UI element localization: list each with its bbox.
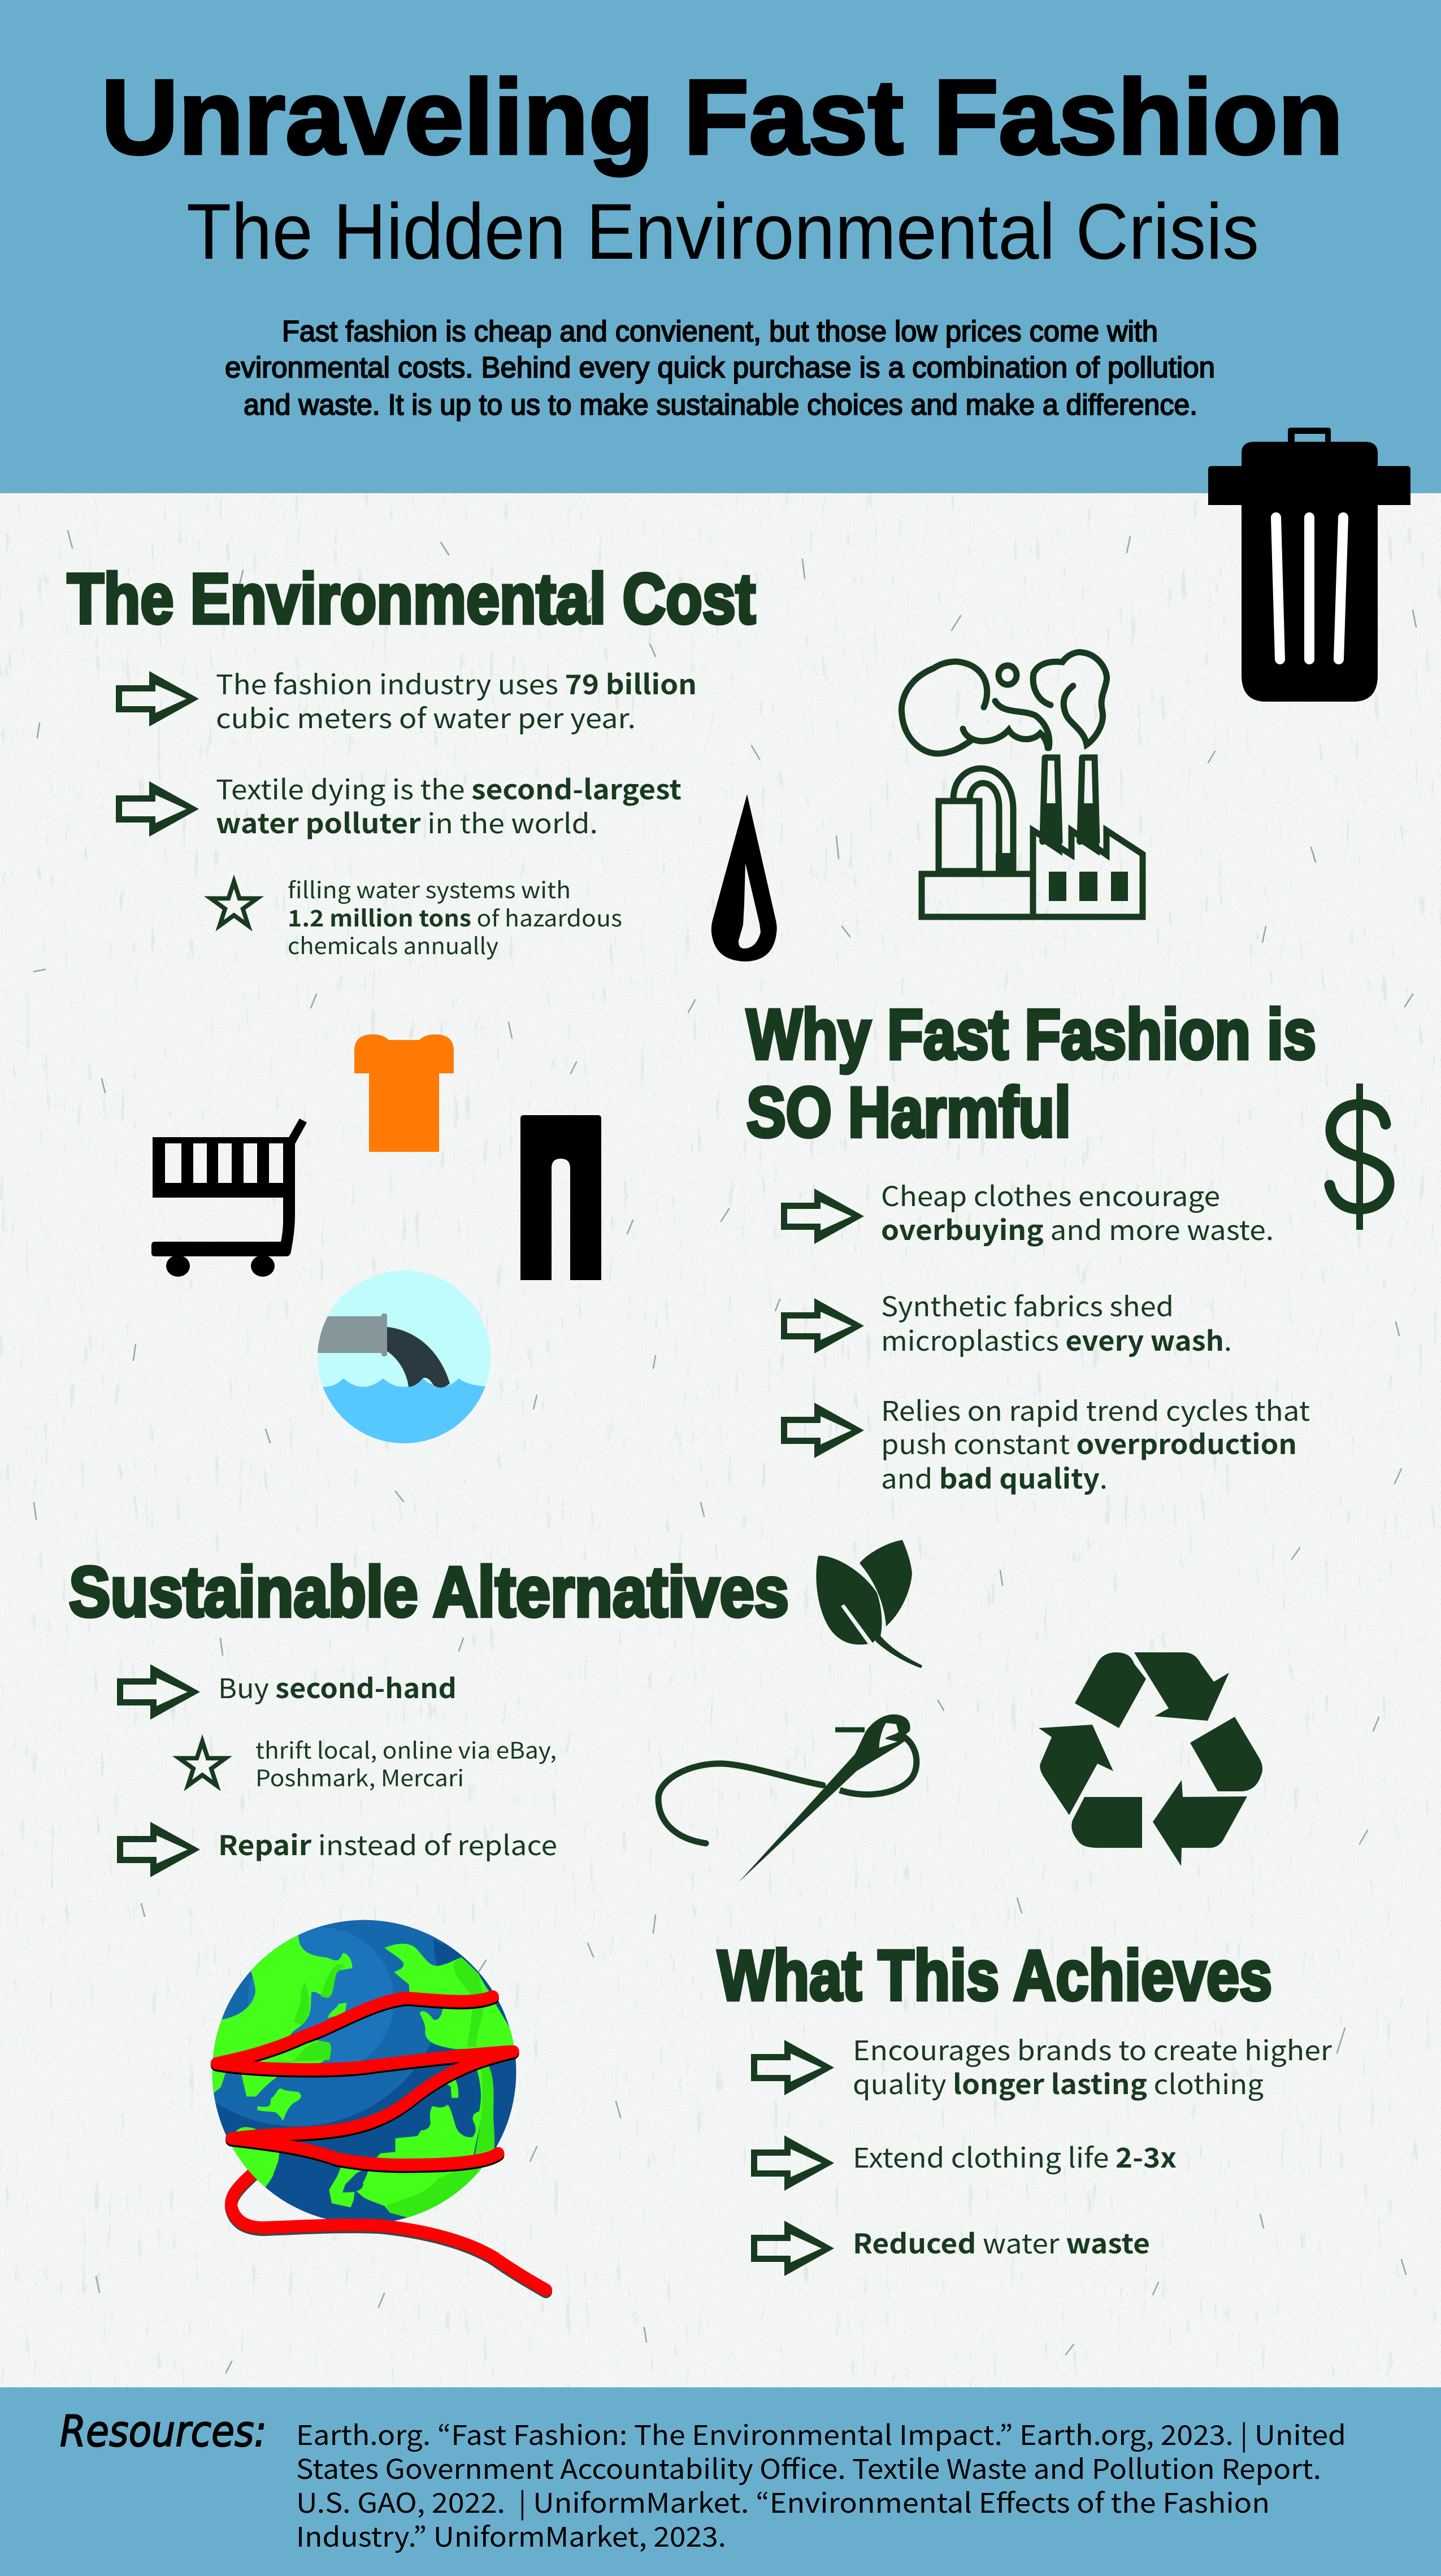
arrow (116, 671, 199, 726)
text: microplastics (881, 1285, 1232, 1359)
panel: resources footer (0, 2387, 1441, 2576)
text: overbuying: Cheap clothes encourage (881, 1174, 1220, 1214)
text: thrift options (255, 1733, 557, 1793)
panel: what this achieves (718, 1937, 1332, 2276)
text: clothing life: Extend clothing life 2-3x (853, 2136, 1177, 2175)
icon: shopping cart (151, 1119, 307, 1277)
intro paragraph: and waste. It is up to us to make sustainable choices and make a difference. (244, 389, 1197, 421)
text: overproduction (881, 1389, 1310, 1496)
panel: paper background (0, 493, 1441, 2387)
text: hazardous chemicals: 1.2 million tons of hazardous (288, 900, 622, 933)
heading: The Environmental Cost (67, 560, 756, 638)
panel: sustainable alternatives (69, 1553, 789, 1877)
intro paragraph: evironmental costs. Behind every quick purchase is a combination of pollution (225, 351, 1215, 384)
text: buy second-hand: Buy second-hand (218, 1666, 457, 1706)
icon: dollar sign (1330, 1084, 1389, 1230)
text: water polluter: Textile dying is the second-largest (216, 768, 682, 807)
text: higher quality: Encourages brands to create higher (853, 2029, 1332, 2068)
icon: water drop (711, 794, 777, 961)
text: citations (296, 2413, 1346, 2555)
arrow (751, 2135, 834, 2191)
heading: SO Harmful (746, 1073, 1071, 1152)
text: thrift options: thrift local, online via eBay, (255, 1733, 557, 1765)
text: hazardous chemicals: chemicals annually (288, 928, 498, 961)
intro paragraph: Fast fashion is cheap and convienent, but those low prices come with (282, 315, 1158, 348)
text: higher quality (853, 2029, 1332, 2102)
text: overproduction: push constant overproduction (881, 1422, 1297, 1462)
icon: leaves (816, 1540, 922, 1668)
panel: the environmental cost (67, 560, 756, 961)
icon: factory (901, 652, 1143, 917)
arrow (117, 1664, 200, 1720)
text: water waste: Reduced water waste (853, 2222, 1150, 2261)
heading: Sustainable Alternatives (69, 1553, 789, 1631)
intro paragraph (225, 315, 1215, 421)
subtitle: The Hidden Environmental Crisis (186, 187, 1259, 276)
text: hazardous chemicals: filling water systems with (288, 872, 571, 905)
star icon (204, 874, 264, 932)
text: repair: Repair instead of replace (218, 1824, 557, 1863)
star icon (172, 1734, 232, 1791)
heading: What This Achieves (718, 1937, 1272, 2015)
title: Unraveling Fast Fashion (101, 58, 1343, 176)
text: thrift options: Poshmark, Mercari (255, 1760, 464, 1793)
heading: resources: Resources: (60, 2406, 267, 2456)
arrow (117, 1822, 200, 1877)
arrow (751, 2221, 834, 2276)
arrow (751, 2040, 834, 2095)
text: citations: Earth.org. “Fast Fashion: The Environmental Impact.” Earth.org, 2023. | United (296, 2413, 1346, 2453)
text: microplastics: Synthetic fabrics shed (881, 1285, 1174, 1324)
text: overbuying: overbuying and more waste. (881, 1208, 1274, 1248)
text: citations: Industry.” UniformMarket, 2023. (296, 2515, 726, 2555)
text: water polluter (216, 768, 682, 841)
red thread (217, 1996, 546, 2292)
arrow (781, 1298, 864, 1354)
text: overbuying (881, 1174, 1274, 1248)
text: citations: U.S. GAO, 2022. | UniformMarket. “Environmental Effects of the Fashion (296, 2481, 1270, 2521)
text: higher quality: quality longer lasting clothing (853, 2062, 1264, 2102)
text: overproduction: Relies on rapid trend cycles that (881, 1389, 1310, 1429)
panel: illustration of shopping (151, 1034, 601, 1452)
text: overproduction: and bad quality . (881, 1457, 1108, 1496)
arrow (116, 781, 199, 837)
text: hazardous chemicals (288, 872, 622, 961)
icon: globe wrapped in red thread (210, 1920, 553, 2298)
text: water polluter: water polluter in the world. (216, 802, 598, 841)
icon: polluting pipe (318, 1270, 491, 1443)
panel: header banner (0, 0, 1441, 493)
text: water use: cubic meters of water per year. (216, 697, 636, 736)
text: microplastics: microplastics every wash . (881, 1319, 1232, 1359)
icon: orange t-shirt (354, 1034, 454, 1152)
icon: trash can (1208, 428, 1410, 702)
icon: black pants (520, 1115, 601, 1280)
heading (746, 995, 1316, 1152)
icon: trash can slots (1276, 517, 1343, 659)
icon: recycling symbol (1039, 1652, 1262, 1866)
arrow (781, 1189, 864, 1244)
text: citations: States Government Accountability Office. Textile Waste and Pollution Report. (296, 2447, 1321, 2487)
text: water use (216, 663, 697, 736)
arrow (781, 1403, 864, 1458)
panel: why fast fashion is so harmful (746, 995, 1389, 1496)
text: water use: The fashion industry uses 79 billion (216, 663, 697, 702)
heading: Why Fast Fashion is (746, 995, 1316, 1074)
icon: needle and thread (658, 1715, 917, 1882)
